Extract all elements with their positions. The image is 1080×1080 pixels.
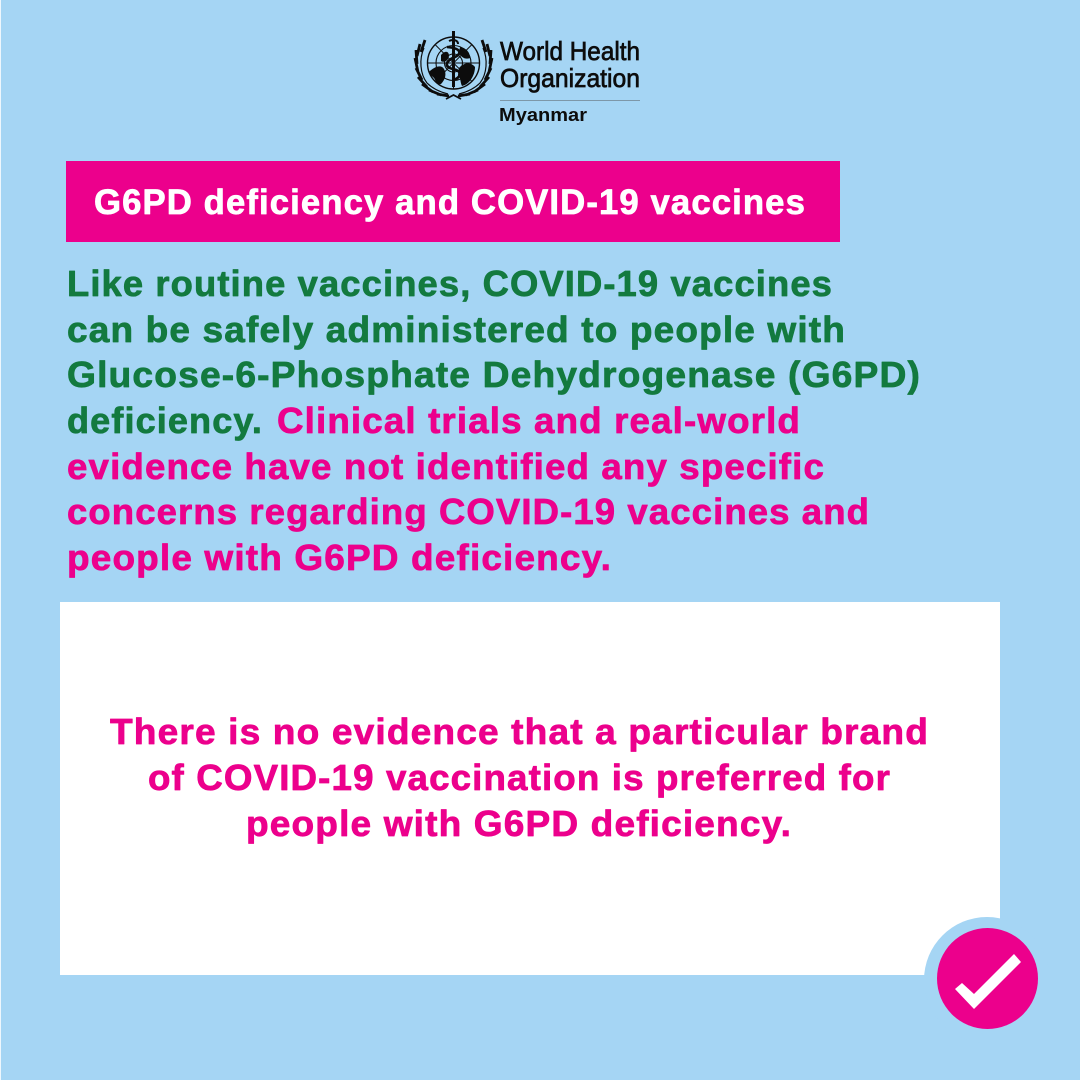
callout text — [110, 711, 929, 844]
logo: World Health Organization Myanmar: Organization — [500, 63, 640, 93]
intro text block: Like routine vaccines, COVID-19 vaccines — [67, 263, 833, 304]
intro text block: deficiency. — [67, 400, 263, 441]
intro text block: concerns regarding COVID-19 vaccines and — [67, 491, 870, 532]
panel: white callout card — [60, 602, 1000, 975]
intro text block — [67, 263, 921, 578]
intro text block: Clinical trials and real-world — [277, 400, 801, 441]
intro text block: evidence have not identified any specific — [67, 446, 825, 487]
intro text block: Glucose-6-Phosphate Dehydrogenase (G6PD) — [67, 354, 921, 395]
callout text: of COVID-19 vaccination is preferred for — [148, 757, 891, 798]
heading banner: G6PD deficiency and COVID-19 vaccines — [94, 183, 806, 222]
icon: check mark badge — [924, 917, 1080, 1080]
logo: World Health Organization Myanmar — [415, 31, 640, 125]
callout text: There is no evidence that a particular brand — [110, 711, 929, 752]
heading banner — [66, 161, 840, 242]
laurel right — [458, 40, 492, 96]
intro text block: can be safely administered to people with — [67, 309, 846, 350]
intro text block: people with G6PD deficiency. — [67, 537, 612, 578]
callout text: people with G6PD deficiency. — [246, 803, 792, 844]
logo wordmark: World Health — [500, 36, 640, 66]
laurel left — [415, 40, 449, 96]
icon: WHO emblem — [415, 31, 492, 99]
logo country label: Myanmar — [499, 105, 587, 125]
